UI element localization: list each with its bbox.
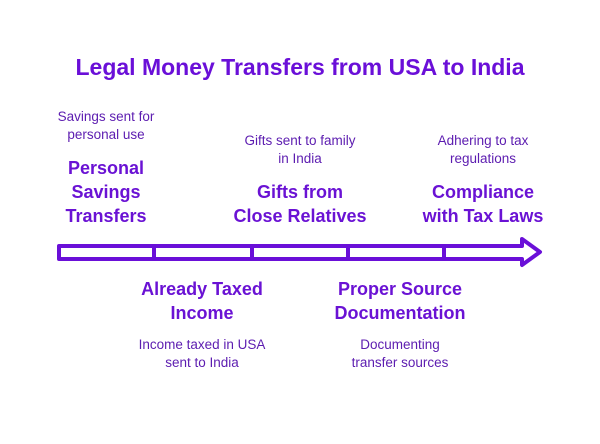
title: Legal Money Transfers from USA to India bbox=[75, 54, 524, 80]
desc: already taxed bbox=[139, 337, 266, 370]
heading: compliance: with Tax Laws bbox=[423, 206, 543, 226]
heading: documentation: Proper Source bbox=[338, 279, 462, 299]
heading: personal savings: Personal bbox=[68, 158, 144, 178]
heading: already taxed bbox=[141, 279, 263, 323]
desc: personal savings: personal use bbox=[67, 127, 145, 142]
item: personal savings bbox=[58, 109, 154, 142]
heading: gifts: Gifts from bbox=[257, 182, 343, 202]
desc: already taxed: Income taxed in USA bbox=[139, 337, 265, 352]
desc: personal savings bbox=[58, 109, 154, 142]
heading: gifts: Close Relatives bbox=[233, 206, 367, 226]
heading: already taxed: Income bbox=[170, 303, 234, 323]
heading: documentation: Documentation bbox=[334, 303, 466, 323]
desc: documentation bbox=[352, 337, 448, 370]
desc: gifts: Gifts sent to family bbox=[244, 133, 356, 148]
heading: personal savings bbox=[65, 158, 147, 226]
heading: compliance: Compliance bbox=[432, 182, 534, 202]
desc: personal savings: Savings sent for bbox=[58, 109, 154, 124]
heading: documentation bbox=[334, 279, 466, 323]
desc: gifts: in India bbox=[278, 151, 322, 166]
desc: gifts bbox=[244, 133, 356, 166]
heading: compliance bbox=[422, 182, 543, 226]
heading: personal savings: Savings bbox=[71, 182, 141, 202]
heading: already taxed: Already Taxed bbox=[141, 279, 263, 299]
desc: compliance bbox=[438, 133, 528, 166]
desc: documentation: Documenting bbox=[360, 337, 440, 352]
heading: gifts bbox=[233, 182, 367, 226]
heading: personal savings: Transfers bbox=[65, 206, 147, 226]
desc: compliance: regulations bbox=[450, 151, 516, 166]
desc: documentation: transfer sources bbox=[352, 355, 448, 370]
desc: compliance: Adhering to tax bbox=[438, 133, 528, 148]
desc: already taxed: sent to India bbox=[165, 355, 239, 370]
